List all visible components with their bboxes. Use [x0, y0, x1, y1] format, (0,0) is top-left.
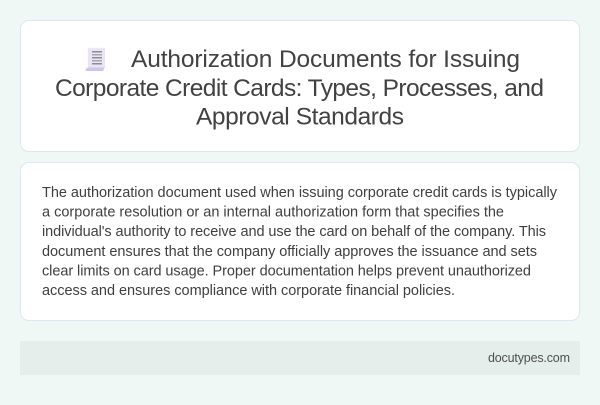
title	[55, 46, 544, 130]
panel: title card	[20, 20, 580, 152]
title: Corporate Credit Cards: Types, Processes, and	[55, 75, 544, 102]
text block: description	[42, 185, 558, 299]
footer bar	[20, 341, 580, 375]
text block: description: clear limits on card usage. Proper documentation helps prevent unauthorized	[42, 263, 531, 279]
title: Authorization Documents for Issuing	[131, 46, 520, 73]
icon: document	[86, 48, 105, 71]
text block: description: The authorization document used when issuing corporate credit cards is typically	[42, 185, 558, 201]
text block: description: access and ensures compliance with corporate financial policies.	[42, 283, 455, 299]
panel: description card	[20, 162, 580, 320]
title: Approval Standards	[196, 104, 404, 130]
text block: description: individual's authority to receive and use the card on behalf of the company. This	[42, 224, 546, 240]
text block: description: a corporate resolution or an internal authorization form that specifies the	[42, 205, 504, 221]
text block: description: document ensures that the company officially approves the issuance and sets	[42, 244, 537, 260]
footer source text: docutypes.com	[488, 351, 570, 365]
